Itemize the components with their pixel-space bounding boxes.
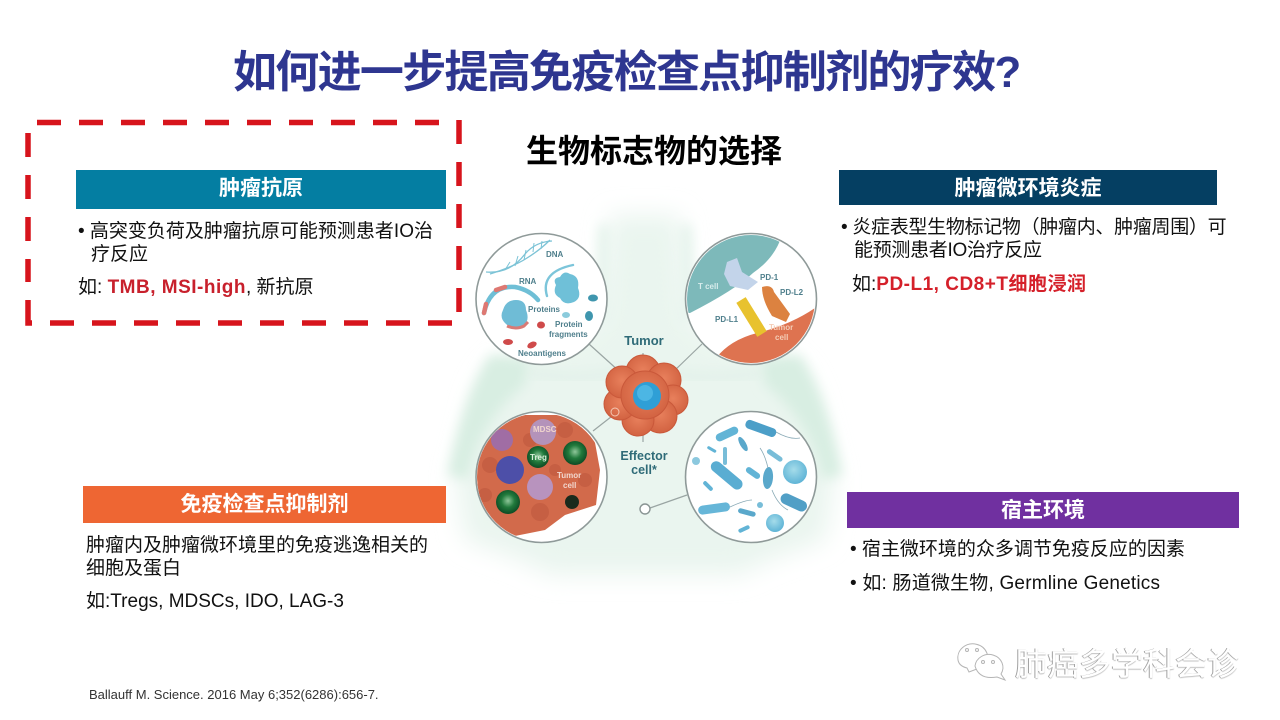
circle: PD-1 / PD-L1: T cell bbox=[698, 282, 718, 291]
bullet example text: • 如: 肠道微生物, Germline Genetics bbox=[850, 573, 1160, 594]
heading: checkpoint inhibitors: 免疫检查点抑制剂 bbox=[180, 493, 348, 516]
circle: tumor antigens bbox=[476, 234, 607, 364]
DNA helix bbox=[486, 240, 552, 274]
example text: 如:PD-L1, CD8+T细胞浸润 bbox=[852, 274, 1086, 295]
bullet text: • 炎症表型生物标记物（肿瘤内、肿瘤周围）可 bbox=[841, 217, 1226, 238]
circle: tumor microenvironment cells bbox=[476, 412, 607, 542]
circle: tumor antigens: Neoantigens bbox=[518, 349, 567, 358]
icon: chat bubbles bbox=[957, 643, 1006, 681]
circle: PD-1 / PD-L1: PD-L2 bbox=[780, 288, 804, 297]
panel: tumor antigens bbox=[76, 170, 446, 298]
heading: inflammation bbox=[839, 170, 1217, 205]
panel: host environment bbox=[847, 492, 1239, 594]
bullet text: 疗反应 bbox=[91, 244, 148, 265]
protein blobs bbox=[502, 273, 598, 328]
bullet text bbox=[78, 220, 433, 265]
label: Effector cell: cell* bbox=[631, 463, 657, 477]
central illustration: torso with four biomarker circles bbox=[444, 212, 846, 578]
body text bbox=[86, 534, 428, 579]
circle: PD-1 / PD-L1: PD-L1 bbox=[715, 315, 739, 324]
circle: tumor antigens: RNA bbox=[519, 277, 537, 286]
citation: Ballauff M. Science. 2016 May 6;352(6286):656-7. bbox=[89, 687, 379, 702]
bullet text bbox=[841, 216, 1226, 261]
watermark text: 肺癌多学科会诊 bbox=[1015, 646, 1239, 682]
example text: 如:Tregs, MDSCs, IDO, LAG-3 bbox=[86, 591, 344, 612]
subtitle: 生物标志物的选择 bbox=[526, 133, 782, 169]
heading: inflammation: 肿瘤微环境炎症 bbox=[954, 177, 1102, 200]
label: Effector cell: Effector bbox=[620, 449, 668, 463]
bullet text: • 高突变负荷及肿瘤抗原可能预测患者IO治 bbox=[78, 221, 433, 242]
circle: tumor microenvironment cells: Tumor bbox=[557, 471, 581, 480]
torso silhouette bbox=[448, 215, 842, 575]
heading: tumor antigens bbox=[76, 170, 446, 209]
circle: tumor microenvironment cells: MDSC bbox=[533, 425, 557, 434]
heading: tumor antigens: 肿瘤抗原 bbox=[219, 177, 303, 200]
title: 如何进一步提高免疫检查点抑制剂的疗效? bbox=[233, 48, 1020, 97]
bullet text: • 宿主微环境的众多调节免疫反应的因素 bbox=[850, 539, 1185, 560]
panel: tumor microenvironment inflammation bbox=[839, 170, 1226, 295]
example text: 如: TMB, MSI-high, 新抗原 bbox=[78, 277, 314, 298]
heading: host environment bbox=[847, 492, 1239, 528]
circle: tumor antigens: Proteins bbox=[528, 305, 561, 314]
body text: 肿瘤内及肿瘤微环境里的免疫逃逸相关的 bbox=[86, 535, 428, 556]
neoantigen fragments bbox=[503, 322, 545, 350]
circle: tumor antigens: DNA bbox=[546, 250, 564, 259]
bullet text: 能预测患者IO治疗反应 bbox=[854, 240, 1042, 261]
body text: 细胞及蛋白 bbox=[86, 558, 181, 579]
circle: tumor antigens: Protein bbox=[555, 320, 583, 329]
watermark bbox=[957, 643, 1239, 682]
heading: host environment: 宿主环境 bbox=[1001, 499, 1085, 522]
circle: PD-1 / PD-L1: Tumor bbox=[769, 323, 793, 332]
circle: gut microbiome bbox=[686, 412, 816, 542]
circle: tumor microenvironment cells: cell bbox=[563, 481, 576, 490]
circle: PD-1 / PD-L1 bbox=[680, 234, 816, 370]
RNA strands bbox=[484, 265, 573, 313]
heading: checkpoint inhibitors bbox=[83, 486, 446, 523]
connector lines bbox=[589, 344, 702, 514]
circle: PD-1 / PD-L1: cell bbox=[775, 333, 788, 342]
circle: PD-1 / PD-L1: PD-1 bbox=[760, 273, 779, 282]
label: Tumor: Tumor bbox=[624, 333, 664, 348]
panel: immune checkpoint inhibitors bbox=[83, 486, 446, 612]
tumor cluster bbox=[604, 355, 688, 436]
circle: tumor microenvironment cells: Treg bbox=[530, 453, 547, 462]
circle: tumor antigens: fragments bbox=[549, 330, 588, 339]
